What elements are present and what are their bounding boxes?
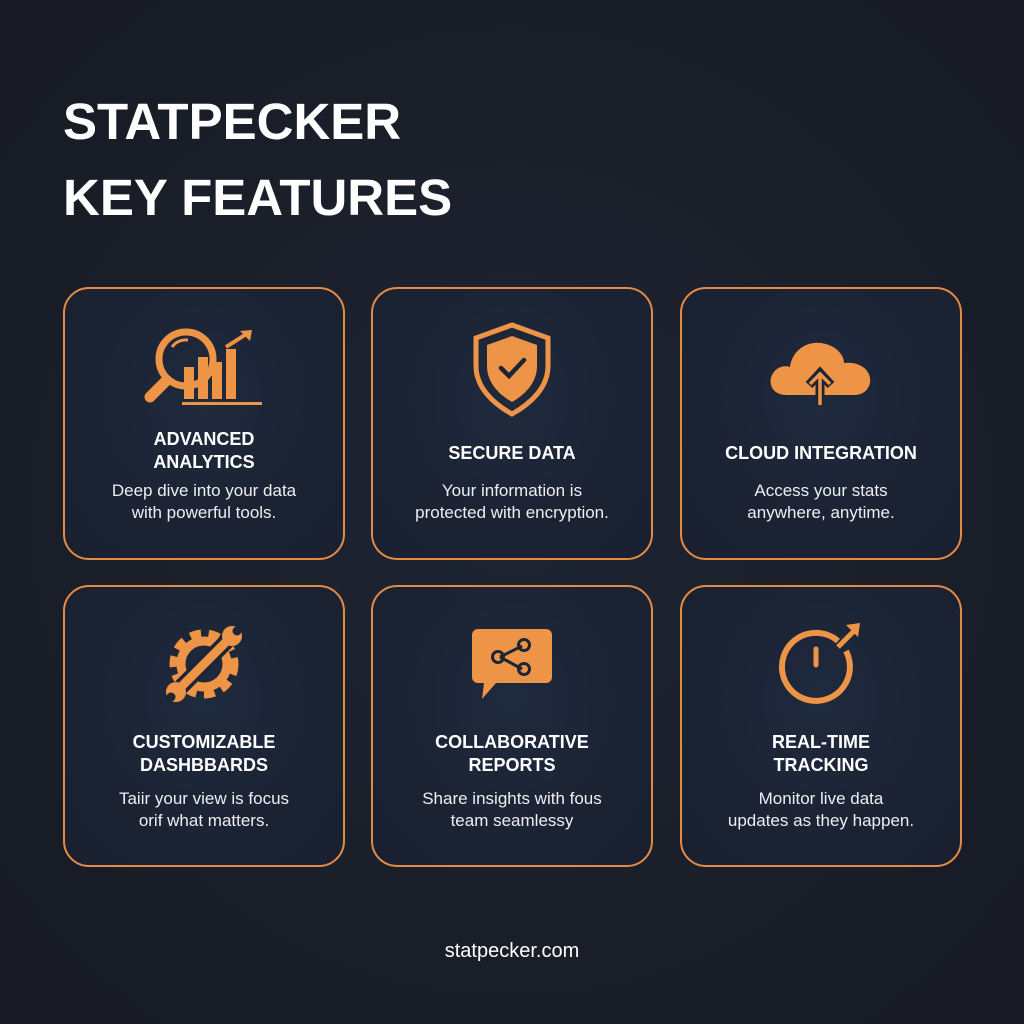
heading [153, 429, 255, 472]
text block [422, 789, 602, 830]
text block [728, 789, 914, 830]
title [63, 93, 452, 226]
title: KEY FEATURES [63, 169, 452, 226]
icon: shield [474, 322, 550, 417]
panel: real-time tracking [680, 585, 962, 867]
text block: anywhere, anytime. [747, 503, 895, 522]
text block: team seamlessy [451, 811, 573, 830]
heading [133, 732, 275, 775]
text block: Share insights with fous [422, 789, 602, 808]
heading [772, 732, 870, 775]
heading [435, 732, 589, 775]
heading: DASHBBARDS [140, 755, 268, 775]
text block: with powerful tools. [132, 503, 276, 522]
heading: SECURE DATA [448, 443, 576, 463]
heading: TRACKING [774, 755, 868, 775]
heading: CLOUD INTEGRATION [725, 443, 917, 463]
text block: protected with encryption. [415, 503, 609, 522]
heading: REAL-TIME [772, 732, 870, 752]
heading: CUSTOMIZABLE [133, 732, 275, 752]
panel: advanced analytics [63, 287, 345, 560]
icon: share bubble [472, 629, 552, 699]
panel: secure data [371, 287, 653, 560]
text block: updates as they happen. [728, 811, 914, 830]
heading: ANALYTICS [153, 452, 255, 472]
icon: stopwatch arrow [778, 623, 860, 704]
text block: Your information is [442, 481, 582, 500]
heading: REPORTS [468, 755, 556, 775]
text block: Deep dive into your data [112, 481, 296, 500]
title: STATPECKER [63, 93, 401, 150]
text block: Access your stats [754, 481, 888, 500]
heading: COLLABORATIVE [435, 732, 589, 752]
text block: Taiir your view is focus [119, 789, 289, 808]
text block [112, 481, 296, 522]
text block [119, 789, 289, 830]
panel: cloud integration [680, 287, 962, 560]
icon: magnifier chart [144, 328, 262, 405]
icon: cloud upload [770, 342, 870, 405]
text block: orif what matters. [139, 811, 269, 830]
panel: collaborative reports [371, 585, 653, 867]
text block [747, 481, 895, 522]
footer: statpecker.com [445, 940, 579, 962]
heading: ADVANCED [154, 429, 254, 449]
icon: gear wrench [166, 626, 242, 702]
text block: Monitor live data [759, 789, 883, 808]
panel: customizable dashboards [63, 585, 345, 867]
text block [415, 481, 609, 522]
